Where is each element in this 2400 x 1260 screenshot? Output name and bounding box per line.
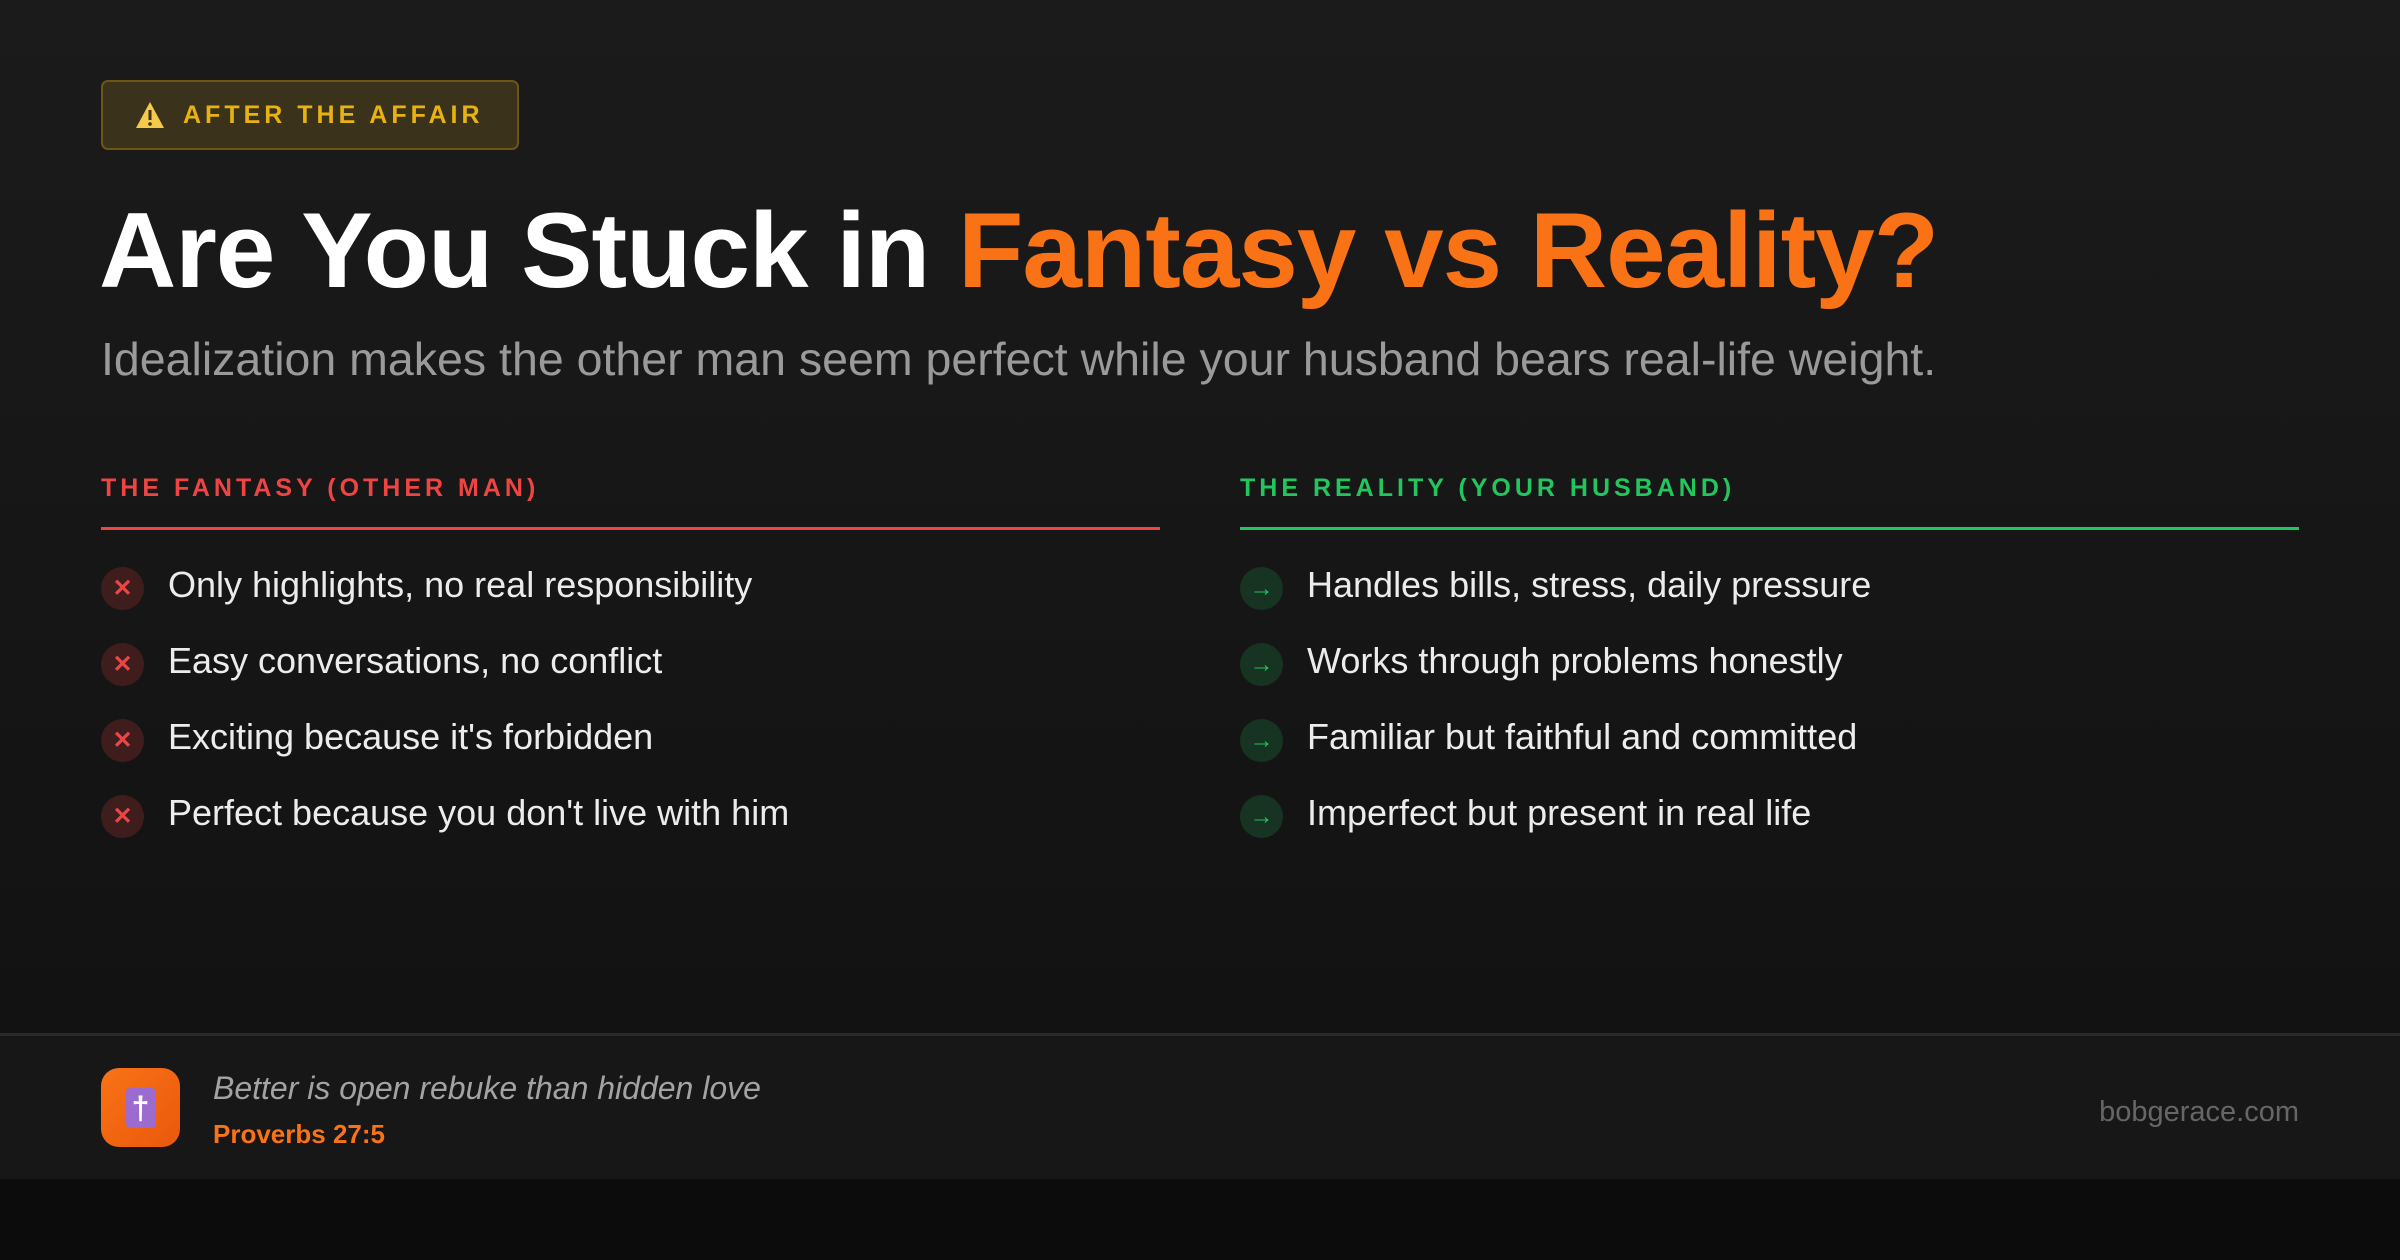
badge: after the affair: AFTER THE AFFAIR <box>183 100 484 128</box>
reality list: → <box>1250 802 1274 830</box>
panel: fantasy <box>101 474 1160 838</box>
site: bobgerace.com <box>2099 1096 2299 1128</box>
subtitle: Idealization makes the other man seem perfect while your husband bears real-life weight. <box>101 333 1936 385</box>
fantasy list: ✕ <box>112 575 133 602</box>
reality list: → <box>1250 650 1274 678</box>
fantasy list: Exciting because it's forbidden <box>168 716 653 757</box>
quote: Better is open rebuke than hidden love <box>213 1070 761 1106</box>
reality list: Imperfect but present in real life <box>1307 792 1811 833</box>
fantasy list <box>101 564 789 838</box>
panel: reality <box>1240 474 2299 838</box>
footer <box>0 1033 2400 1179</box>
fantasy heading: THE FANTASY (OTHER MAN) <box>101 474 539 502</box>
reality list: → <box>1250 574 1274 602</box>
fantasy list: ✕ <box>112 803 133 830</box>
reference: Proverbs 27:5 <box>213 1119 385 1149</box>
icon: cross: † <box>132 1090 149 1126</box>
reality heading: THE REALITY (YOUR HUSBAND) <box>1240 474 1735 502</box>
reality list: Handles bills, stress, daily pressure <box>1307 564 1871 605</box>
reality list: Works through problems honestly <box>1307 640 1843 681</box>
icon: cross <box>101 1068 180 1147</box>
fantasy list: Only highlights, no real responsibility <box>168 564 752 605</box>
fantasy list: Perfect because you don't live with him <box>168 792 789 833</box>
reality list: → <box>1250 726 1274 754</box>
fantasy list: ✕ <box>112 651 133 678</box>
fantasy list: ✕ <box>112 727 133 754</box>
reality list: Familiar but faithful and committed <box>1307 716 1857 757</box>
reality list <box>1240 564 1871 838</box>
badge: after the affair <box>101 80 519 150</box>
fantasy list: Easy conversations, no conflict <box>168 640 662 681</box>
title: Are You Stuck in Fantasy vs Reality? <box>99 190 1938 310</box>
